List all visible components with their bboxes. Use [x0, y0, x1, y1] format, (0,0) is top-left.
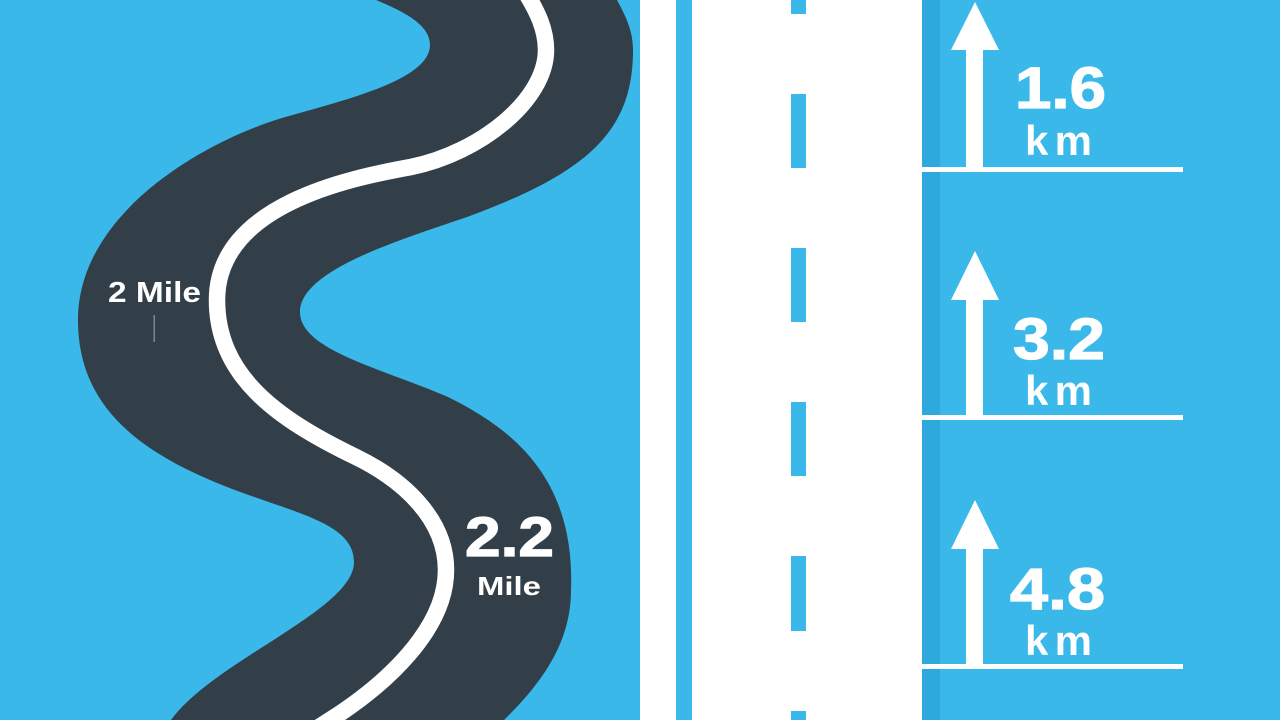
value: 3.2 — [1013, 307, 1105, 372]
road shadow band — [922, 0, 940, 720]
panel: 1.6 km marker — [922, 2, 1183, 172]
baseline — [922, 664, 1183, 669]
panel: winding road — [78, 0, 633, 720]
road centre line — [217, 0, 546, 720]
dashed lane markings — [791, 0, 806, 720]
white road edge strip — [640, 0, 676, 720]
label: 2 Mile: 2 Mile — [108, 277, 201, 309]
label: 2.2 Mile: 2.2 — [465, 505, 554, 568]
unit: km — [1025, 367, 1092, 414]
panel: 3.2 km marker — [922, 251, 1183, 420]
unit: km — [1025, 117, 1092, 164]
label: 2.2 Mile — [465, 505, 554, 601]
panel: straight road — [640, 0, 940, 720]
panel: 4.8 km marker — [922, 500, 1183, 669]
unit: km — [1025, 617, 1092, 664]
value: 4.8 — [1010, 557, 1105, 622]
white road surface — [692, 0, 922, 720]
small tick under 2 Mile — [154, 315, 155, 342]
value: 1.6 — [1015, 56, 1106, 121]
arrow — [951, 251, 999, 415]
label: 2.2 Mile: Mile — [477, 571, 541, 601]
arrow — [951, 500, 999, 664]
road surface — [78, 0, 633, 720]
baseline — [922, 167, 1183, 172]
arrow — [951, 2, 999, 167]
baseline — [922, 415, 1183, 420]
